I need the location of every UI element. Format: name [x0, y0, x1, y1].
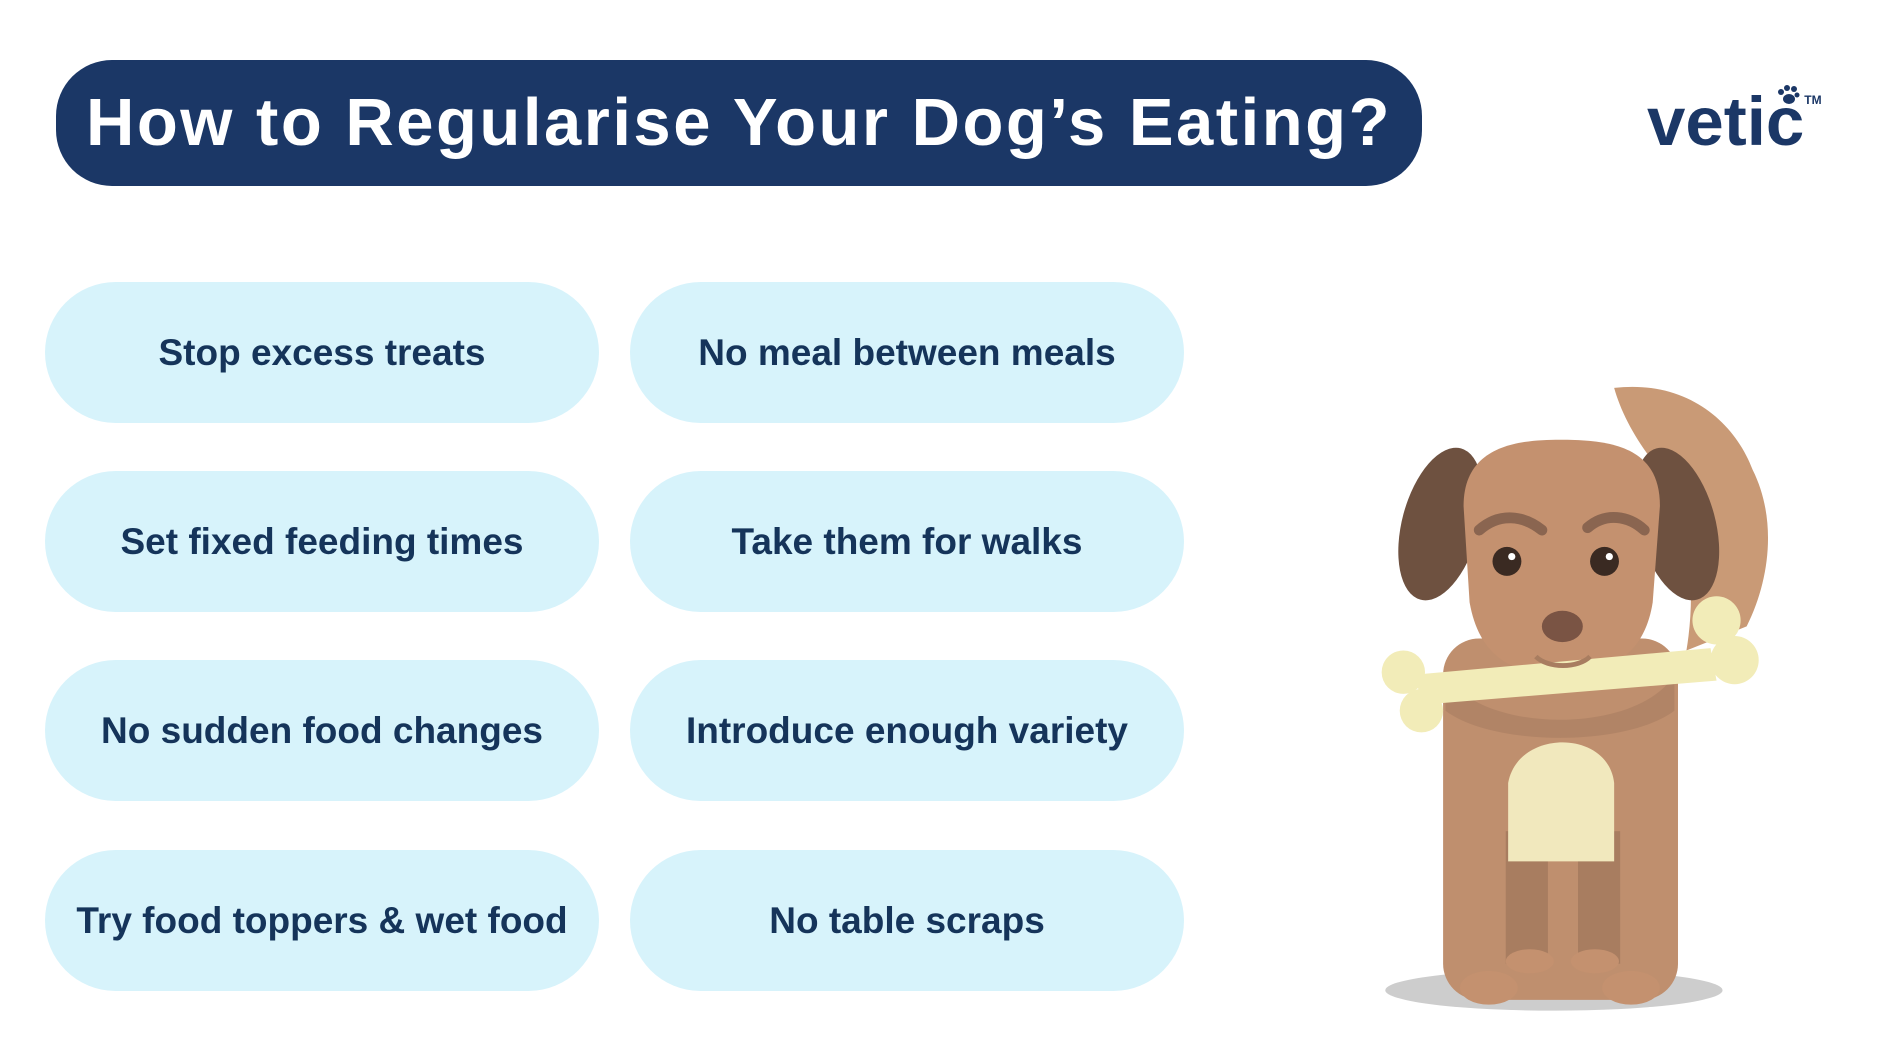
pill: Take them for walks: Take them for walks — [732, 521, 1082, 562]
pill: Try food toppers & wet food — [45, 850, 599, 991]
pill: No table scraps: No table scraps — [769, 900, 1045, 941]
pill: Stop excess treats — [45, 282, 599, 423]
title — [56, 60, 1422, 186]
pill: Stop excess treats: Stop excess treats — [158, 332, 486, 373]
logo: vetic: veticTM — [1647, 83, 1822, 160]
pill: Introduce enough variety: Introduce enough variety — [686, 710, 1128, 751]
pill: No table scraps — [630, 850, 1184, 991]
pill: No sudden food changes — [45, 660, 599, 801]
pill: Take them for walks — [630, 471, 1184, 612]
pill: Introduce enough variety — [630, 660, 1184, 801]
pill: No meal between meals: No meal between meals — [698, 332, 1116, 373]
pill: Try food toppers & wet food: Try food toppers & wet food — [76, 900, 568, 941]
pill: Set fixed feeding times — [45, 471, 599, 612]
pill: No meal between meals — [630, 282, 1184, 423]
title: How to Regularise Your Dog’s Eating? — [86, 85, 1392, 160]
pill: Set fixed feeding times: Set fixed feeding times — [120, 521, 524, 562]
pill: No sudden food changes: No sudden food changes — [101, 710, 543, 751]
